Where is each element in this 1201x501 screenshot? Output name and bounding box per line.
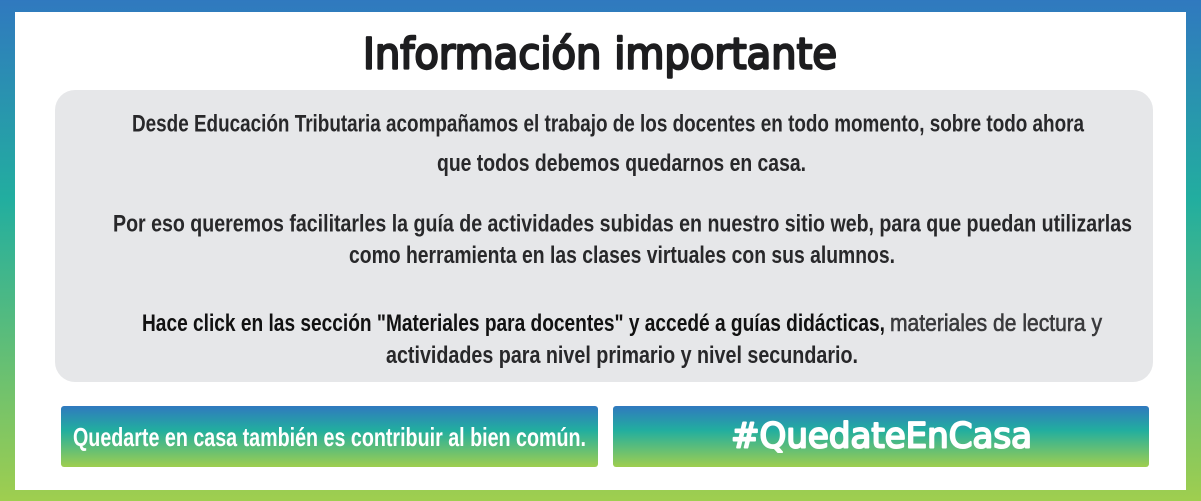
text block: paragraph 3 (142, 310, 1103, 369)
text block: paragraph 1 (132, 110, 1084, 177)
button: left slogan: Quedarte en casa también es contribuir al bien común. (73, 422, 586, 452)
button: left slogan (61, 406, 598, 467)
text block: paragraph 2 (113, 210, 1132, 269)
title: Información importante (363, 30, 837, 80)
text block: paragraph 2: como herramienta en las clases virtuales con sus alumnos. (349, 242, 895, 269)
button: hashtag: #QuedateEnCasa (731, 416, 1032, 456)
text block: paragraph 3: actividades para nivel primario y nivel secundario. (386, 342, 858, 369)
button: hashtag (613, 406, 1149, 467)
panel: message (55, 90, 1153, 382)
text block: paragraph 3: materiales de lectura y (890, 310, 1103, 337)
text block: paragraph 1: que todos debemos quedarnos en casa. (437, 150, 806, 177)
text block: paragraph 3: Hace click en las sección "Materiales para docentes" y accedé a guías didácticas, (142, 310, 885, 337)
